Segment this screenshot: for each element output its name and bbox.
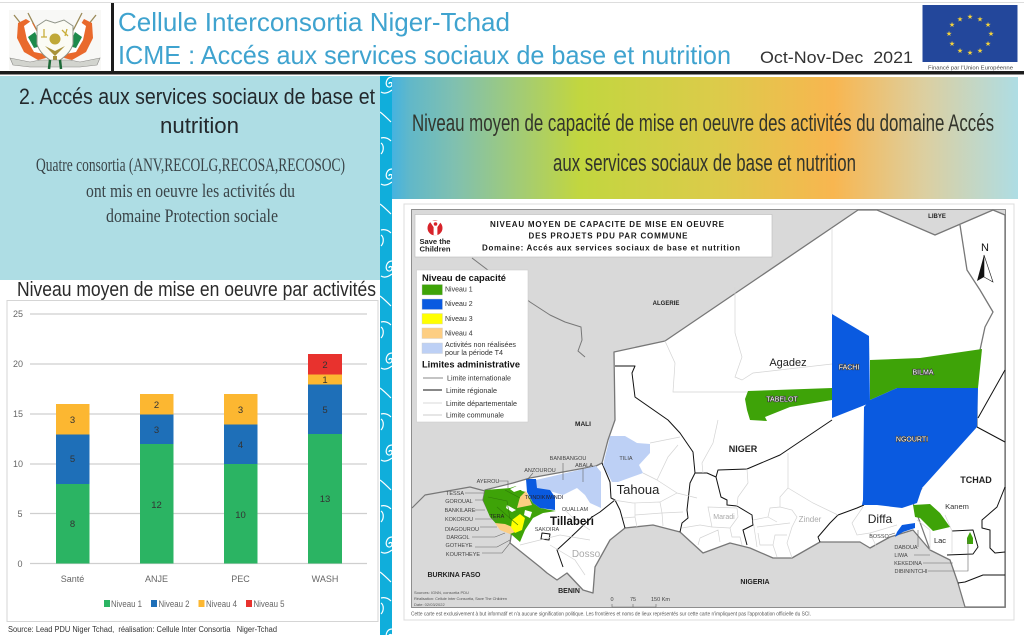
map sources: Date: 02/03/2022 — [414, 602, 445, 607]
bar: WASH — [308, 354, 342, 584]
choropleth region: Lac commune — [967, 532, 973, 544]
commune callouts west: ABALA — [575, 463, 593, 469]
bar: Santé — [56, 404, 90, 584]
map legend: Limite communale — [446, 412, 504, 420]
map labels: Kanem — [945, 502, 969, 511]
chart legend: Niveau 4 — [206, 599, 237, 609]
map labels: Diffa — [868, 512, 893, 526]
map labels: TILIA — [619, 456, 633, 462]
scale bar — [610, 597, 670, 607]
icon: EU flag: ★ — [988, 30, 994, 38]
map sources: Sources: IGNN, consortia PDU — [414, 590, 469, 595]
bar: PEC: 4 — [238, 440, 243, 451]
commune callouts west: KOURTHEYE — [446, 552, 480, 558]
section description: ont mis en oeuvre les activités du — [86, 181, 295, 202]
bar: ANJE: 3 — [154, 425, 159, 436]
y axis labels: 10 — [13, 459, 23, 469]
commune callouts east: DIBININTCHI — [894, 569, 928, 575]
bar: PEC — [224, 394, 258, 584]
icon: EU flag: ★ — [985, 21, 991, 29]
commune boundaries — [520, 228, 952, 575]
choropleth region: white gaps — [506, 480, 532, 518]
section description: domaine Protection sociale — [106, 206, 278, 227]
icon: EU flag — [922, 5, 1018, 62]
commune callouts west: GOROUAL — [445, 499, 473, 505]
Niger and Chad land area — [483, 210, 1005, 607]
map sources: Réalisation: Cellule Inter Consortia, Save The Children — [414, 596, 507, 601]
map legend: Niveau 1 — [445, 286, 473, 294]
panel: map — [404, 204, 1014, 620]
icon: Save the Children logo — [420, 220, 451, 254]
map title box: DES PROJETS PDU PAR COMMUNE — [528, 232, 688, 240]
y axis labels: 5 — [17, 509, 23, 519]
map labels: Agadez — [769, 357, 807, 369]
panel: map heading — [392, 77, 1018, 199]
bar: WASH: WASH — [312, 574, 338, 584]
scale bar: 150 Km — [651, 597, 670, 603]
section description: Quatre consortia (ANV,RECOLG,RECOSA,RECOSOC) — [36, 155, 345, 176]
icon: Niger coat of arms — [9, 10, 101, 70]
chart legend: Niveau 1 — [111, 599, 142, 609]
bar: WASH: 5 — [322, 405, 328, 416]
bar: WASH: 2 — [322, 360, 328, 371]
map title box — [415, 214, 772, 257]
map legend: Niveau de capacité — [422, 273, 506, 284]
regional lines on Tillaberi — [488, 490, 520, 525]
map legend — [416, 270, 528, 422]
bar: Santé: 8 — [70, 519, 75, 530]
map legend: pour la période T4 — [445, 350, 503, 357]
y axis labels: 25 — [13, 309, 23, 319]
section heading: 2. Accés aux services sociaux de base et — [19, 84, 375, 109]
commune callouts west: AYEROU — [477, 479, 499, 485]
map labels: Dosso — [572, 549, 601, 560]
bar: WASH: 13 — [320, 494, 330, 505]
map labels: BENIN — [558, 588, 580, 595]
map legend: Activités non réalisées — [445, 342, 516, 349]
map legend: Limite internationale — [447, 376, 511, 382]
map labels: TERA — [490, 514, 505, 520]
commune callouts west: TESSA — [446, 491, 464, 497]
decorative swirl strip — [380, 76, 392, 635]
choropleth region: Tondikiwindi — [526, 479, 555, 510]
y axis labels: 20 — [13, 359, 23, 369]
icon: EU flag: ★ — [967, 13, 973, 21]
scale bar: 0 — [610, 597, 614, 603]
map labels: BURKINA FASO — [427, 572, 481, 579]
commune callouts east: DABOUA — [894, 545, 918, 551]
choropleth region: Bosso — [895, 523, 915, 537]
map disclaimer: Cette carte est exclusivement à but informatif et n'a aucune signification politique. Les frontières et noms de lieux représentés sur cette carte n'impliquent pas l'approbation officielle du SCI. — [411, 612, 811, 618]
bar: PEC: PEC — [231, 574, 250, 584]
map legend: Niveau 4 — [445, 330, 473, 338]
choropleth region: Tabelot — [745, 388, 832, 421]
map sources — [414, 590, 507, 607]
icon: EU flag: ★ — [949, 40, 955, 48]
icon: EU flag: ★ — [977, 16, 983, 24]
commune callouts west: DIAGOUROU — [445, 527, 479, 533]
bar: ANJE: ANJE — [145, 574, 168, 584]
date: Oct-Nov-Dec 2021 — [760, 48, 913, 67]
map labels: Maradi — [713, 514, 735, 521]
bar: ANJE — [140, 394, 174, 584]
map title box: NIVEAU MOYEN DE CAPACITE DE MISE EN OEUVRE — [490, 220, 725, 229]
EU funding caption: Financé par l'Union Européenne — [928, 66, 1013, 72]
y axis labels: 15 — [13, 409, 23, 419]
icon: EU flag: ★ — [967, 49, 973, 57]
choropleth region: Tillia — [603, 436, 650, 482]
choropleth region: Kanem — [913, 504, 950, 531]
icon: Save the Children logo: Children — [420, 246, 450, 254]
map labels: Tahoua — [617, 482, 660, 497]
choropleth region: Tera and neighbours — [483, 486, 556, 542]
scale bar: 75 — [630, 597, 636, 603]
map labels: TONDIKIWINDI — [525, 495, 564, 501]
map labels: ALGERIE — [653, 301, 679, 307]
borders — [412, 225, 1005, 583]
bar: WASH: 1 — [322, 375, 328, 386]
map title box: Domaine: Accés aux services sociaux de base et nutrition — [482, 244, 740, 252]
map labels: FACHI — [839, 364, 859, 372]
commune callouts west: BANIBANGOU — [550, 456, 586, 462]
chart legend — [104, 599, 284, 609]
bar: Santé: 3 — [70, 415, 75, 426]
commune callouts west: BANKILARE — [445, 508, 476, 514]
chart legend: Niveau 2 — [158, 599, 190, 609]
icon: EU flag: ★ — [985, 40, 991, 48]
icon: north arrow: N — [981, 242, 989, 254]
map legend: Niveau 2 — [445, 301, 473, 308]
commune callouts west: GOTHEYE — [446, 543, 473, 549]
section heading — [19, 84, 375, 138]
bar: ANJE: 12 — [151, 500, 162, 511]
bar: PEC: 3 — [238, 405, 243, 416]
bar: Santé: Santé — [61, 574, 84, 584]
commune callouts east: LIWA — [894, 553, 908, 559]
section description — [36, 155, 345, 227]
choropleth region: Ngourti — [862, 388, 978, 508]
map legend: Niveau 3 — [445, 316, 473, 323]
commune callouts east: KEKEDINA — [894, 561, 922, 567]
icon: EU flag: ★ — [957, 47, 963, 55]
map legend: Limite départementale — [446, 401, 517, 408]
map labels: NGOURTI — [896, 436, 928, 444]
bar chart — [7, 300, 378, 622]
choropleth region: yellow communes — [511, 514, 525, 533]
commune callouts west — [445, 456, 593, 558]
map labels: TABELOT — [766, 396, 798, 404]
commune callouts east — [869, 530, 968, 575]
map labels: Lac — [934, 536, 946, 545]
map legend: Limites administrative — [422, 360, 520, 370]
chart legend: Niveau 5 — [254, 599, 284, 609]
choropleth region: Banibangou and Abala — [536, 466, 601, 508]
map labels — [427, 214, 992, 595]
map labels: MALI — [575, 421, 591, 428]
title: header line 2: ICME : Accés aux services sociaux de base et nutrition — [118, 40, 731, 70]
commune callouts west: ANZOUROU — [524, 468, 556, 474]
y axis labels — [13, 309, 23, 569]
commune callouts west: KOKOROU — [445, 517, 473, 523]
map labels: LIBYE — [928, 214, 946, 220]
choropleth region: Bilma — [870, 349, 982, 400]
header band — [0, 0, 1024, 74]
map labels: NIGERIA — [740, 579, 770, 586]
choropleth region: Fachi — [832, 314, 870, 418]
map legend: Limite régionale — [446, 388, 497, 395]
bar: ANJE: 2 — [154, 400, 159, 411]
icon: north arrow — [977, 242, 993, 282]
map labels: NIGER — [729, 444, 758, 454]
map labels: TCHAD — [960, 475, 992, 485]
bar: PEC: 10 — [235, 510, 246, 521]
commune callouts west: DARGOL — [446, 535, 470, 541]
map labels: Zinder — [799, 515, 822, 524]
commune callouts east: BOSSO — [869, 534, 890, 540]
choropleth region: orange communes — [495, 491, 532, 534]
source note: Source: Lead PDU Niger Tchad, réalisation: Cellule Inter Consortia Niger-Tchad — [8, 625, 277, 634]
chart title: Niveau moyen de mise en oeuvre par activités — [17, 279, 376, 301]
panel: map heading: aux services sociaux de base et nutrition — [553, 150, 856, 177]
icon: EU flag: ★ — [977, 47, 983, 55]
title: header line 1: Cellule Interconsortia Niger-Tchad — [118, 7, 510, 37]
icon: EU flag: ★ — [957, 16, 963, 24]
section heading: nutrition — [160, 113, 239, 138]
map labels: SAKOIRA — [535, 527, 560, 533]
map labels: Tillaberi — [550, 516, 594, 528]
icon: EU flag: ★ — [949, 21, 955, 29]
icon: EU flag: ★ — [946, 30, 952, 38]
bar: Santé: 5 — [70, 454, 75, 465]
map labels: BILMA — [912, 370, 934, 376]
icon: Save the Children logo: Save the — [420, 239, 451, 246]
y axis labels: 0 — [17, 559, 23, 569]
panel: section intro — [0, 76, 380, 280]
map labels: OUALLAM — [562, 507, 589, 513]
